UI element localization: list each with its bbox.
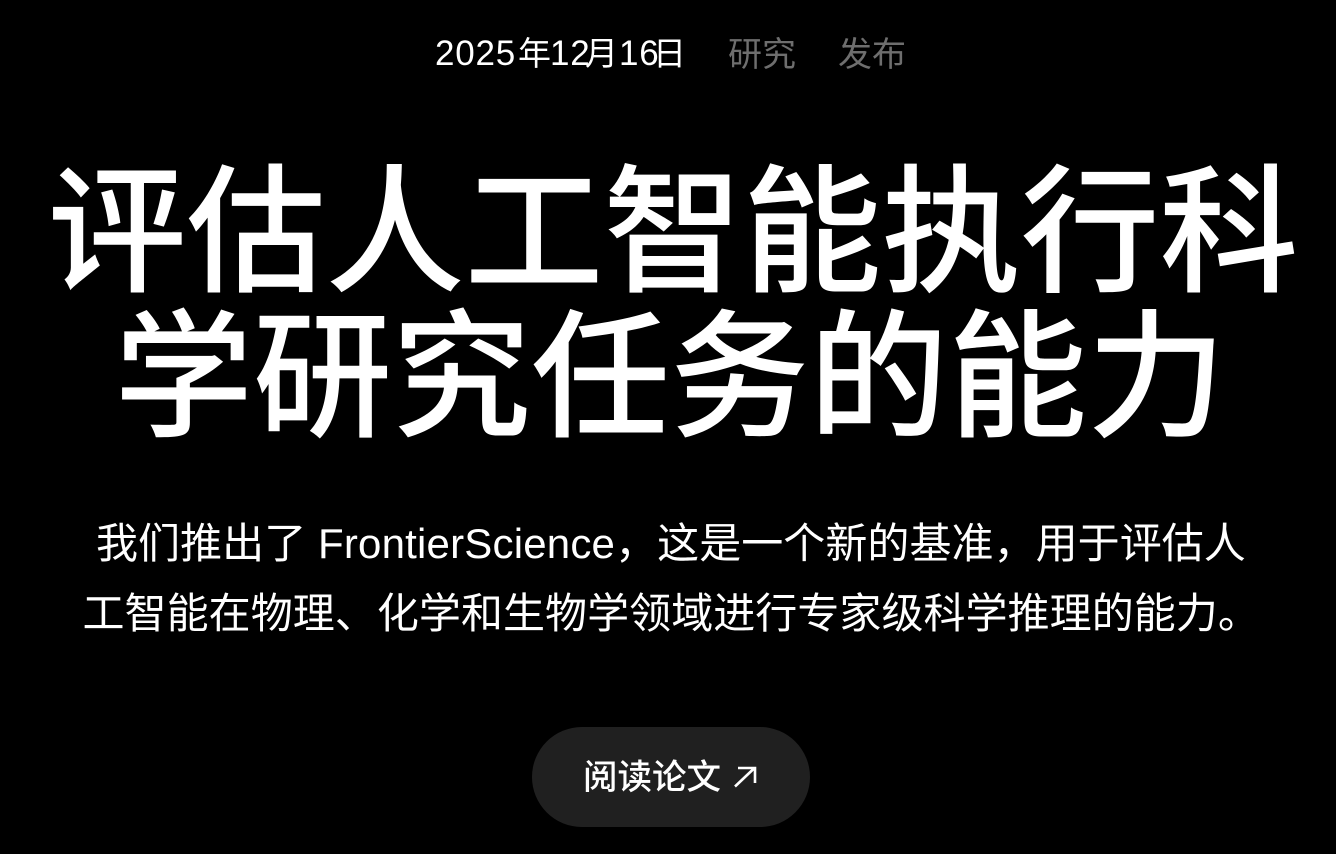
date: [435, 34, 686, 73]
date: 2025: [435, 34, 516, 73]
title: 学研究任务的能力: [114, 301, 1226, 456]
category: research: 研究: [728, 36, 796, 74]
description: 我们推出了 FrontierScience，这是一个新的基准，用于评估人: [96, 520, 1246, 567]
title: 评估人工智能执行科: [48, 156, 1298, 311]
category: release: 发布: [838, 36, 906, 74]
button: read paper: [532, 727, 810, 827]
button label: 阅读论文: [583, 759, 721, 797]
date: 16: [619, 34, 660, 73]
date: 12: [550, 34, 591, 73]
title: [48, 156, 1298, 456]
icon: arrow up-right: [734, 766, 756, 788]
description: [82, 520, 1260, 637]
date: 年: [518, 35, 551, 72]
description: 工智能在物理、化学和生物学领域进行专家级科学推理的能力。: [82, 590, 1260, 637]
date: 日: [653, 35, 686, 72]
meta row: [435, 34, 906, 74]
date: 月: [585, 35, 618, 72]
